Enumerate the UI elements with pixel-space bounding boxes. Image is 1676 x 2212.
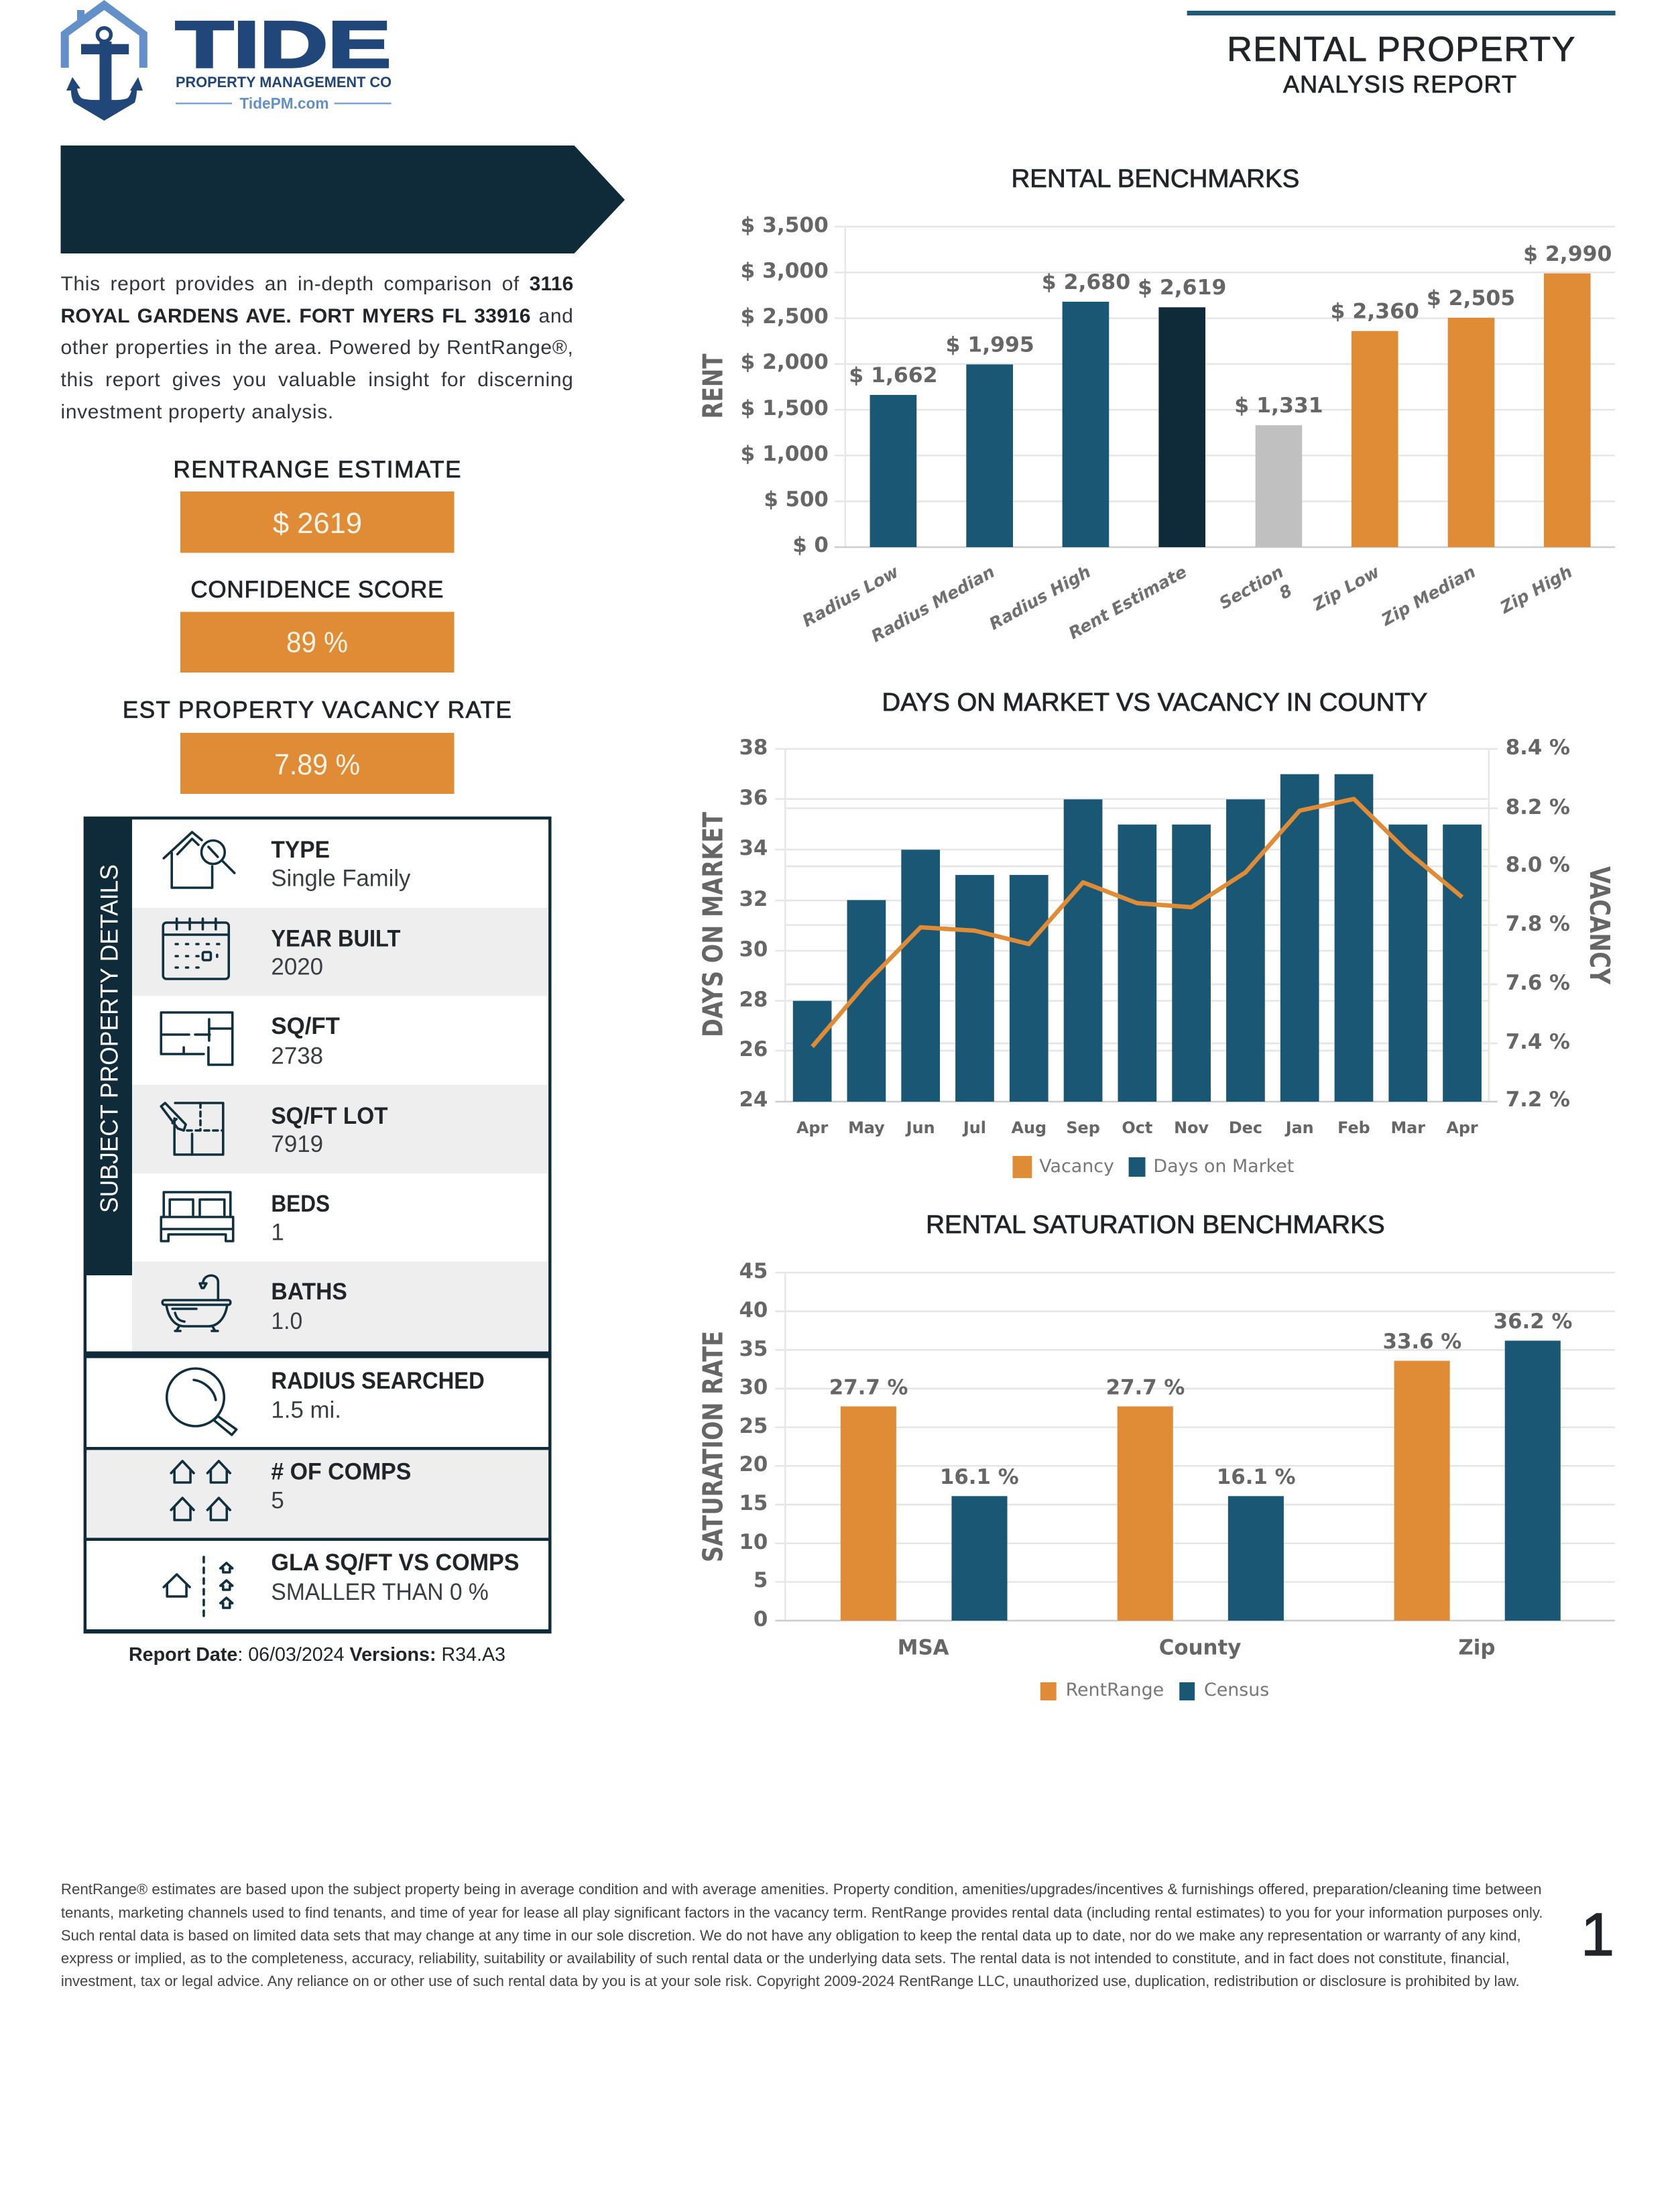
x axis labels: Radius Low [799, 561, 902, 631]
bar value labels: 27.7 % [829, 1375, 908, 1400]
icon: house with magnifier [164, 832, 235, 888]
row: sq ft [271, 1013, 340, 1069]
chart: rental benchmarks [697, 165, 1615, 646]
bars [841, 1341, 1561, 1621]
row: sq ft: SQ/FT [271, 1013, 340, 1039]
row: baths: BATHS [271, 1279, 347, 1305]
right y axis labels: 7.4 % [1506, 1030, 1570, 1054]
report date line: Report Date: 06/03/2024 Versions: R34.A3 [129, 1644, 505, 1666]
x axis labels: Zip Low [1309, 561, 1383, 615]
y axis labels: $ 1,000 [741, 442, 829, 466]
left y axis labels: 34 [739, 836, 768, 860]
x axis labels: Jun [905, 1118, 935, 1137]
right y axis labels: 8.2 % [1506, 795, 1570, 819]
row: sq ft lot: SQ/FT LOT [271, 1103, 388, 1129]
logo: Tide Property Management [61, 0, 392, 121]
icon: house outline [61, 0, 147, 68]
x axis labels: Section [1216, 562, 1286, 613]
x axis labels: MSA [898, 1635, 949, 1660]
bar value labels: 33.6 % [1383, 1330, 1461, 1354]
bar value labels: $ 2,505 [1427, 286, 1515, 310]
right y axis labels: 7.8 % [1506, 912, 1570, 936]
chart: days on market vs vacancy [697, 689, 1616, 1178]
metric: rentrange estimate: $ 2619 [273, 507, 362, 540]
right y axis labels: 7.2 % [1506, 1088, 1570, 1112]
title: RENTAL PROPERTY [1227, 30, 1575, 69]
disclaimer footer [61, 1881, 1543, 1989]
x axis labels: Feb [1337, 1118, 1370, 1137]
row: number of comps: 5 [271, 1487, 284, 1514]
y axis labels: 35 [739, 1337, 768, 1361]
panel: subject property details [84, 818, 551, 1633]
x axis labels: Oct [1122, 1118, 1152, 1137]
legend: Vacancy [1039, 1156, 1114, 1177]
icon: bed [161, 1192, 233, 1241]
row: sq ft lot [271, 1103, 388, 1157]
icon: bath tub [162, 1275, 231, 1331]
row: type: TYPE [271, 837, 330, 863]
left y axis labels: 28 [739, 988, 768, 1012]
sidebar label [86, 819, 132, 1275]
subtitle: ANALYSIS REPORT [1283, 70, 1516, 98]
row: beds: BEDS [271, 1191, 330, 1217]
legend: Days on Market [1153, 1156, 1294, 1177]
metric: vacancy rate: EST PROPERTY VACANCY RATE [123, 697, 512, 723]
icon: four houses [171, 1461, 230, 1520]
bars [870, 274, 1591, 547]
x axis labels: Mar [1390, 1118, 1425, 1137]
left y axis labels: 32 [739, 887, 768, 911]
x axis labels: May [848, 1118, 885, 1137]
right y axis labels: 8.0 % [1506, 853, 1570, 877]
intro paragraph [60, 273, 574, 423]
icon: house versus comps [164, 1557, 233, 1616]
metric: confidence score: CONFIDENCE SCORE [190, 577, 443, 603]
y axis title: SATURATION RATE [697, 1331, 729, 1562]
grid lines [775, 749, 1498, 1102]
metric: confidence score [180, 577, 455, 673]
row: type: Single Family [271, 865, 411, 892]
x axis labels: Sep [1066, 1118, 1100, 1137]
right y axis title: VACANCY [1583, 866, 1616, 984]
bar value labels: $ 1,995 [945, 333, 1034, 357]
bar value labels: $ 2,360 [1331, 299, 1419, 324]
y axis labels: $ 500 [764, 487, 829, 512]
y axis labels: $ 3,000 [741, 259, 829, 283]
y axis labels: $ 1,500 [741, 396, 829, 420]
y axis title: RENT [697, 353, 729, 418]
y axis labels: $ 2,500 [741, 304, 829, 329]
y axis labels: 15 [739, 1491, 768, 1515]
metric: rentrange estimate: RENTRANGE ESTIMATE [173, 457, 461, 483]
metric: vacancy rate [123, 697, 512, 794]
bar value labels: 16.1 % [1217, 1465, 1295, 1489]
disclaimer footer: investment, tax or legal advice. Any reliance on or other use of such rental data by you is at your sole risk. Copyright 2009-2024 RentRange LLC, unauthorized use, duplication, redistribution or disclosure is prohibited by law. [61, 1973, 1520, 1989]
right y axis labels [1506, 736, 1570, 1112]
bar value labels: $ 2,680 [1042, 270, 1130, 294]
x axis labels: Zip High [1496, 562, 1575, 618]
page number: 1 [1581, 1902, 1614, 1969]
icon: calendar [163, 919, 229, 979]
row: beds: 1 [271, 1219, 284, 1246]
logo subtitle: PROPERTY MANAGEMENT CO [176, 74, 392, 91]
x axis labels: Zip [1458, 1635, 1495, 1660]
line: vacancy [813, 799, 1462, 1047]
icon: anchor [66, 28, 143, 121]
metric: confidence score: 89 % [286, 626, 348, 658]
intro paragraph: this report gives you valuable insight for discerning [60, 369, 574, 391]
x axis labels [796, 1118, 1478, 1137]
bar value labels: 36.2 % [1494, 1309, 1572, 1334]
header: report title [1187, 11, 1616, 98]
y axis labels [741, 213, 829, 557]
y axis labels: 30 [739, 1375, 768, 1399]
row: number of comps: # OF COMPS [271, 1458, 411, 1485]
chart title: DAYS ON MARKET VS VACANCY IN COUNTY [882, 689, 1427, 717]
row: type [271, 837, 411, 892]
disclaimer footer: express or implied, as to the completeness, accuracy, reliability, suitability or availability of such rental data or the underlying data sets. The rental data is not intended to constitute, and in fact does not constitute, financial, [61, 1950, 1510, 1967]
left y axis labels: 26 [739, 1037, 768, 1061]
row: gla vs comps: GLA SQ/FT VS COMPS [271, 1550, 520, 1576]
row: sq ft: 2738 [271, 1043, 323, 1069]
y axis labels: 25 [739, 1414, 768, 1438]
y axis labels [739, 1259, 768, 1631]
x axis labels: Radius Median [868, 562, 998, 646]
left y axis labels [739, 736, 768, 1112]
disclaimer footer: tenants, marketing channels used to find tenants, and time of year for lease all play significant factors in the vacancy term. RentRange provides rental data (including rental estimates) to you for your information purposes only. [61, 1904, 1543, 1921]
y axis labels: 5 [754, 1568, 768, 1592]
bar value labels: 27.7 % [1106, 1375, 1185, 1400]
arrow banner [60, 145, 625, 253]
disclaimer footer: RentRange® estimates are based upon the subject property being in average condition and with average amenities. Property condition, amenities/upgrades/incentives & furnishings offered, preparation/cleaning time between [61, 1881, 1542, 1898]
y axis labels: 10 [739, 1530, 768, 1554]
x axis labels: Rent Estimate [1065, 562, 1190, 643]
row: gla vs comps [271, 1550, 520, 1605]
y axis labels: 0 [754, 1607, 768, 1631]
legend [1012, 1156, 1294, 1178]
row: radius searched: RADIUS SEARCHED [271, 1368, 485, 1394]
logo wordmark: TIDE [176, 7, 391, 81]
x axis labels: Radius High [986, 562, 1094, 634]
legend: Census [1204, 1680, 1269, 1700]
left y axis labels: 38 [739, 736, 768, 760]
bar value labels [849, 242, 1612, 418]
chart title: RENTAL SATURATION BENCHMARKS [926, 1211, 1385, 1239]
bar value labels: $ 2,619 [1138, 276, 1226, 300]
row: sq ft lot: 7919 [271, 1131, 323, 1157]
bars: days on market [793, 774, 1482, 1102]
row: gla vs comps: SMALLER THAN 0 % [271, 1579, 489, 1605]
x axis labels [799, 561, 1575, 646]
row: year built: 2020 [271, 953, 323, 980]
legend: RentRange [1066, 1680, 1164, 1700]
right y axis labels: 8.4 % [1506, 736, 1570, 760]
metric: vacancy rate: 7.89 % [274, 748, 360, 781]
y axis labels: 45 [739, 1259, 768, 1283]
y axis labels: $ 3,500 [741, 213, 829, 237]
x axis labels: Apr [1446, 1118, 1478, 1137]
icon: lot plan with pencil [161, 1103, 223, 1155]
icon: floor plan [161, 1012, 233, 1065]
row: number of comps [271, 1458, 411, 1514]
x axis labels: Dec [1229, 1118, 1262, 1137]
intro paragraph: investment property analysis. [60, 401, 334, 423]
table background rows [84, 818, 551, 1633]
icon: magnifying glass [167, 1369, 237, 1435]
intro paragraph: ROYAL GARDENS AVE. FORT MYERS FL 33916 and [60, 305, 574, 327]
left y axis labels: 30 [739, 937, 768, 962]
x axis labels: Nov [1174, 1118, 1209, 1137]
grid lines [775, 1273, 1615, 1621]
sidebar label: SUBJECT PROPERTY DETAILS [96, 864, 123, 1213]
x axis labels [898, 1635, 1495, 1660]
y axis labels: 20 [739, 1452, 768, 1476]
y axis labels: 40 [739, 1298, 768, 1322]
bar value labels: $ 1,662 [849, 363, 938, 388]
row: year built [271, 925, 400, 980]
row: year built: YEAR BUILT [271, 925, 400, 952]
left y axis labels: 24 [739, 1088, 768, 1112]
bar value labels: $ 2,990 [1523, 242, 1612, 266]
row: radius searched [271, 1368, 485, 1423]
x axis labels: Jan [1284, 1118, 1314, 1137]
chart: rental saturation benchmarks [697, 1211, 1615, 1700]
disclaimer footer: Such rental data is based on limited data sets that may change at any time in our sole discretion. We do not have any obligation to keep the rental data up to date, nor do we make any representation or warranty of any kind, [61, 1927, 1521, 1944]
y axis labels: $ 0 [792, 533, 829, 557]
bar value labels [829, 1309, 1572, 1489]
legend [1040, 1680, 1269, 1700]
x axis labels: Zip Median [1378, 562, 1479, 630]
x axis labels: Aug [1011, 1118, 1046, 1137]
intro paragraph: This report provides an in-depth comparison of 3116 [60, 273, 574, 295]
left y axis labels: 36 [739, 786, 768, 810]
y axis labels: $ 2,000 [741, 350, 829, 374]
bar value labels: 16.1 % [940, 1465, 1019, 1489]
x axis labels: Jul [962, 1118, 986, 1137]
metric: rentrange estimate [173, 457, 461, 552]
right y axis labels: 7.6 % [1506, 971, 1570, 995]
row: baths [271, 1279, 347, 1334]
left y axis title: DAYS ON MARKET [697, 812, 729, 1037]
intro paragraph: other properties in the area. Powered by RentRange®, [60, 337, 574, 359]
logo url: TidePM.com [240, 95, 328, 112]
bar value labels: $ 1,331 [1234, 394, 1323, 418]
chart title: RENTAL BENCHMARKS [1011, 165, 1299, 193]
row: radius searched: 1.5 mi. [271, 1397, 341, 1423]
grid lines [835, 227, 1615, 547]
x axis labels: 8 [1276, 581, 1295, 603]
x axis labels: County [1159, 1635, 1241, 1660]
row: baths: 1.0 [271, 1308, 302, 1334]
x axis labels: Apr [796, 1118, 828, 1137]
row: beds [271, 1191, 330, 1246]
